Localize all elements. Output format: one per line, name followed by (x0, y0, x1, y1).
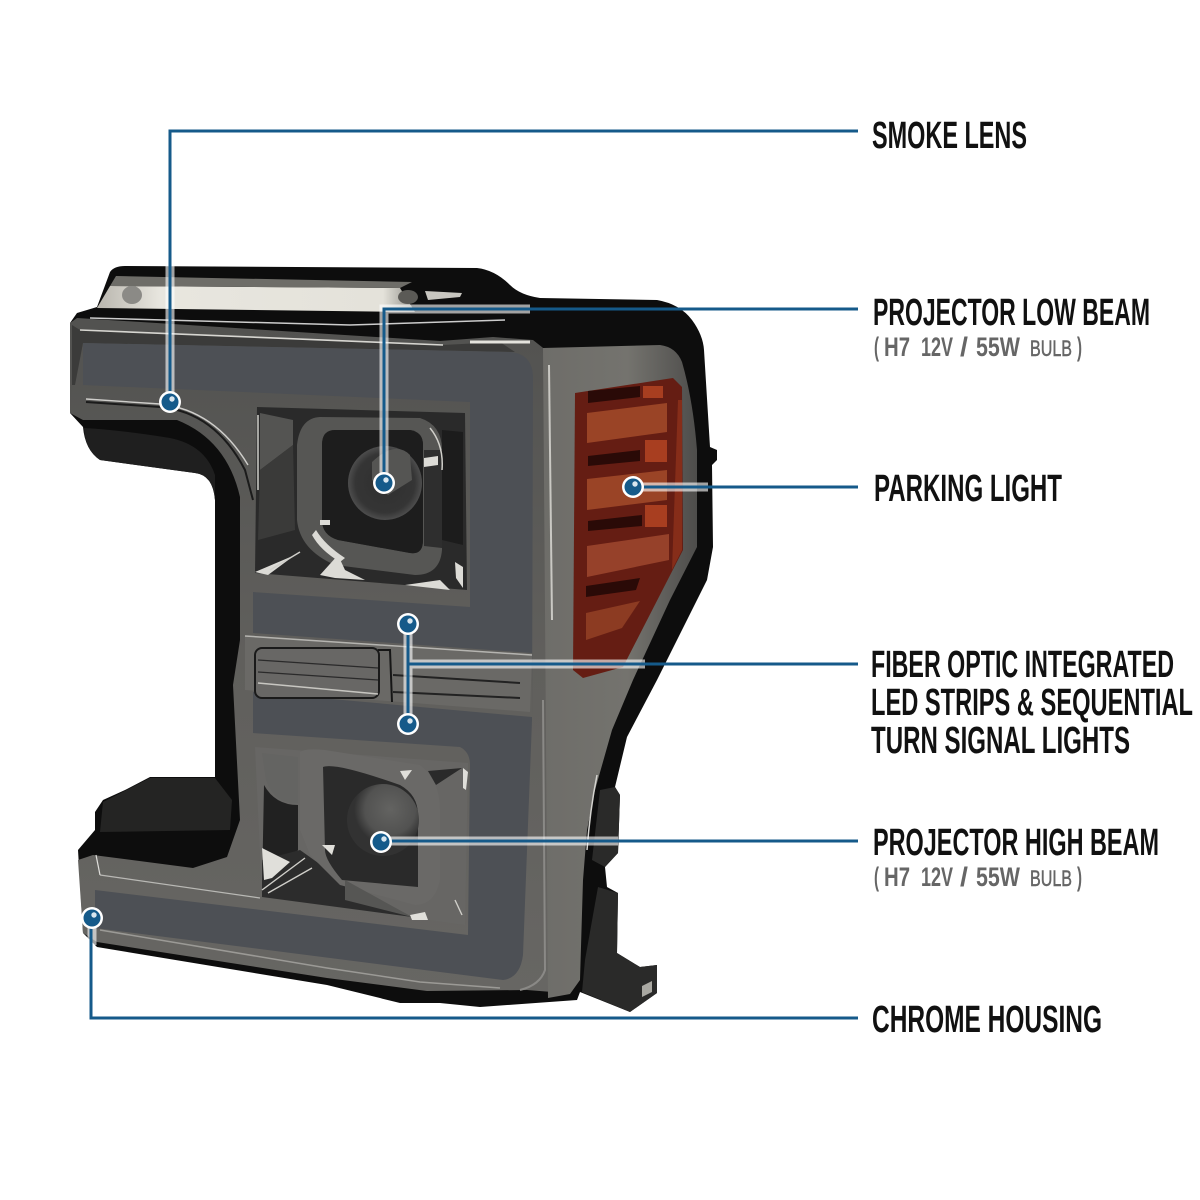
chrome highlight lines (80, 330, 597, 990)
callout: projector high beam: BULB (1030, 866, 1072, 891)
callout: smoke lens: SMOKE LENS (872, 115, 1027, 157)
chrome side face (543, 345, 697, 998)
slate light bar panels (83, 343, 533, 980)
callout: projector high beam (370, 822, 1159, 892)
callout: projector low beam: 55W (976, 332, 1020, 362)
callout: projector low beam: / (960, 332, 969, 362)
lower projector window (255, 747, 468, 925)
callout: projector high beam: 55W (976, 862, 1020, 892)
callout: projector high beam: 12V (921, 862, 953, 892)
amber parking light (573, 378, 683, 678)
projector frame (297, 417, 442, 575)
callout: parking light (622, 468, 1062, 510)
fiber optic turn signal strip (245, 636, 532, 712)
upper projector window (255, 407, 467, 590)
projector frame (300, 749, 440, 905)
callout: parking light: PARKING LIGHT (874, 468, 1062, 510)
dark upper band (72, 325, 515, 385)
chrome reflections (262, 768, 468, 920)
callout: projector low beam: H7 (884, 332, 910, 362)
callout: projector low beam: ) (1077, 332, 1082, 362)
projector lens (347, 784, 419, 856)
chrome front face (70, 318, 565, 993)
chrome reflections (255, 456, 463, 590)
black rear silhouette (70, 266, 717, 1012)
callout: projector low beam: BULB (1030, 336, 1072, 361)
callout: fiber optic LED strips (397, 613, 1193, 762)
callout: smoke lens (159, 115, 1027, 413)
callout: chrome housing (81, 907, 1102, 1041)
callout: projector low beam (373, 292, 1150, 494)
callout: projector low beam: ( (874, 332, 879, 362)
callout: projector high beam: / (960, 862, 969, 892)
callout: projector low beam: 12V (921, 332, 953, 362)
callout: projector high beam: H7 (884, 862, 910, 892)
projector lens (348, 446, 422, 520)
callout: projector high beam: ( (874, 862, 879, 892)
lower mounting bracket (582, 787, 657, 1012)
mounting tab (642, 981, 652, 997)
callout: projector high beam: ) (1077, 862, 1082, 892)
clear upper lens (90, 276, 505, 325)
headlight assembly (70, 266, 717, 1012)
